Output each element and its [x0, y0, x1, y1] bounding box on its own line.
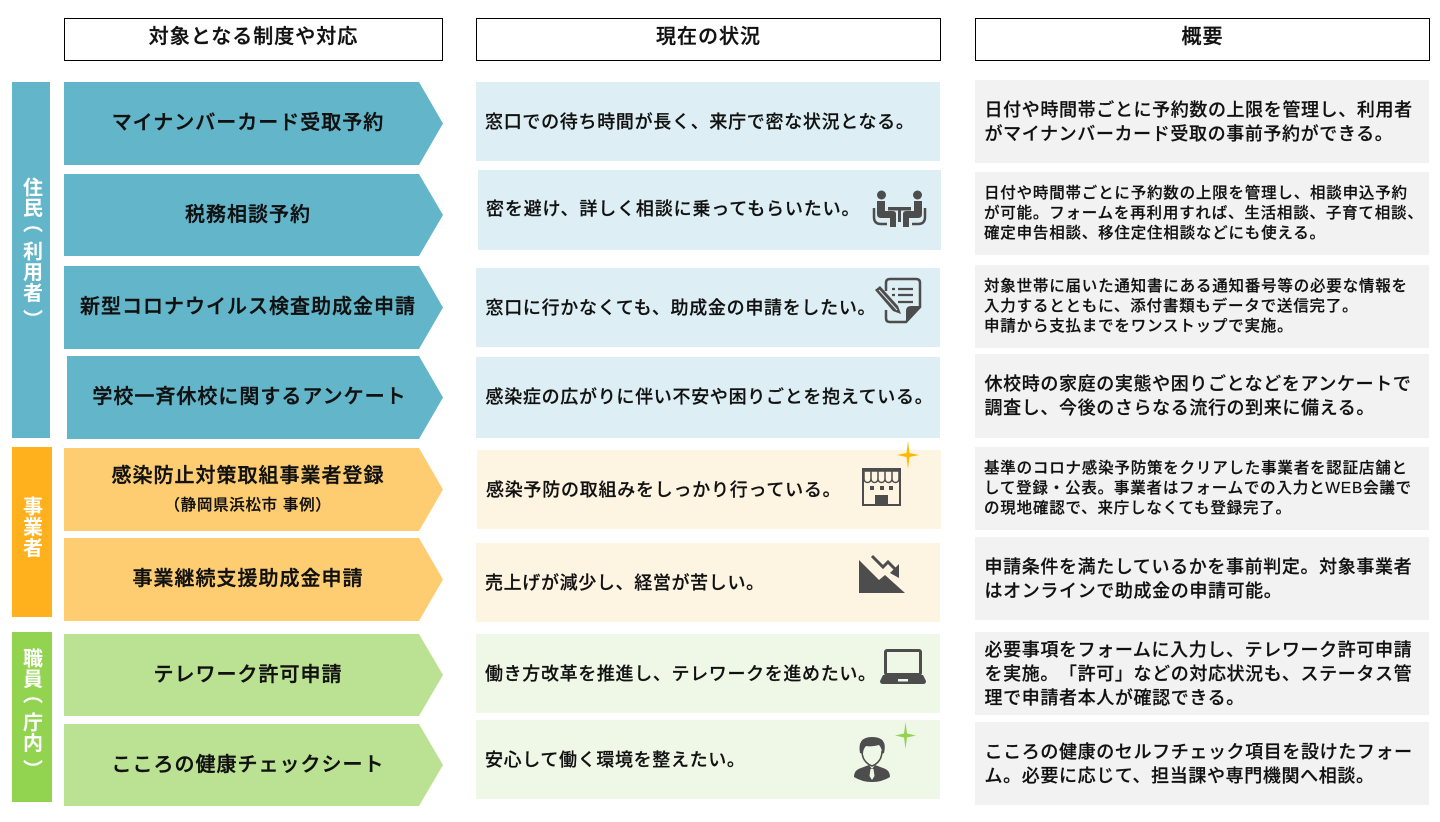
overview: telework	[975, 632, 1429, 715]
situation: telework	[476, 634, 940, 713]
overview: prevention registration: して登録・公表。事業者はフォームでの入力とWEB会議で	[984, 480, 1412, 496]
arrow: telework permit	[64, 634, 443, 716]
overview: telework: 必要事項をフォームに入力し、テレワーク許可申請	[984, 640, 1412, 660]
overview: tax consultation: 日付や時間帯ごとに予約数の上限を管理し、相談申込予約	[984, 184, 1408, 202]
overview: school closure survey: 休校時の家庭の実態や困りごとなどをアンケートで	[984, 374, 1412, 394]
situation: sales decline	[476, 543, 940, 622]
overview: my number card: 日付や時間帯ごとに予約数の上限を管理し、利用者	[984, 100, 1413, 120]
arrow: infection prevention registration: （静岡県浜松市 事例）	[164, 496, 332, 514]
arrow: my number card	[64, 82, 443, 165]
icon: sparkle orange	[897, 441, 919, 469]
overview: prevention registration: 基準のコロナ感染予防策をクリアした事業者を認証店舗と	[984, 460, 1408, 476]
icon: laptop	[880, 649, 926, 684]
overview: telework: 理で申請者本人が確認できる。	[984, 688, 1245, 708]
overview: school closure survey	[975, 354, 1429, 438]
overview: mental health	[975, 722, 1429, 805]
overview: school closure survey: 調査し、今後のさらなる流行の到来に備える。	[984, 398, 1375, 418]
icon: businessman	[854, 737, 890, 782]
situation: prevention efforts	[477, 450, 941, 529]
overview: tax consultation	[975, 172, 1429, 255]
overview: mental health: こころの健康のセルフチェック項目を設けたフォー	[984, 742, 1413, 762]
overview: business subsidy: 申請条件を満たしているかを事前判定。対象事業者	[984, 556, 1412, 576]
situation: avoid crowding: 密を避け、詳しく相談に乗ってもらいたい。	[486, 199, 860, 219]
heading: target systems	[64, 18, 443, 61]
overview: tax consultation: が可能。フォームを再利用すれば、生活相談、子育て相談、	[984, 204, 1424, 222]
icon: consultation at table	[872, 190, 926, 227]
category: staff: ）	[20, 759, 42, 780]
heading: target systems: 対象となる制度や対応	[149, 26, 358, 48]
situation: safe work environment: 安心して働く環境を整えたい。	[485, 750, 746, 770]
overview: covid test subsidy: 対象世帯に届いた通知書にある通知番号等の必要な情報を	[984, 278, 1408, 294]
situation: sales decline: 売上げが減少し、経営が苦しい。	[485, 573, 765, 593]
category: staff: 職員 庁内	[20, 648, 42, 753]
category: residents: （	[20, 213, 42, 234]
arrow: mental health check: こころの健康チェックシート	[112, 754, 384, 776]
overview: covid test subsidy: 申請から支払までをワンストップで実施。	[984, 318, 1293, 334]
overview: my number card: がマイナンバーカード受取の事前予約ができる。	[984, 124, 1393, 144]
situation: online application: 窓口に行かなくても、助成金の申請をしたい。	[486, 298, 876, 318]
category: residents: 住民 利用者	[20, 177, 42, 303]
arrow: my number card: マイナンバーカード受取予約	[112, 112, 384, 134]
category: businesses: 事業者	[20, 496, 42, 558]
overview: business subsidy: はオンラインで助成金の申請可能。	[984, 580, 1282, 600]
situation: anxiety	[476, 357, 940, 438]
situation: waiting time: 窓口での待ち時間が長く、来庁で密な状況となる。	[485, 112, 915, 132]
arrow: business continuity subsidy	[64, 538, 443, 621]
arrow: school closure survey	[67, 356, 443, 439]
arrow: covid test subsidy	[64, 266, 443, 349]
situation: waiting time	[476, 82, 940, 161]
arrow: mental health check	[64, 724, 443, 806]
arrow: tax consultation	[64, 174, 443, 256]
overview: tax consultation: 確定申告相談、移住定住相談などにも使える。	[984, 224, 1326, 242]
category: staff: （	[20, 684, 42, 705]
icon: sparkle green	[895, 722, 916, 749]
icon: storefront	[862, 468, 901, 506]
arrow: tax consultation: 税務相談予約	[185, 204, 311, 226]
arrow: school closure survey: 学校一斉休校に関するアンケート	[92, 386, 407, 408]
overview: covid test subsidy	[975, 265, 1429, 348]
situation: safe work environment	[476, 720, 940, 799]
situation: online application	[476, 268, 940, 347]
category: residents: ）	[20, 309, 42, 329]
category: staff	[12, 632, 50, 802]
arrow: telework permit: テレワーク許可申請	[154, 664, 342, 686]
overview: covid test subsidy: 入力するとともに、添付書類もデータで送信完了。	[984, 298, 1358, 314]
overview: my number card	[975, 80, 1429, 163]
icon: falling sales	[859, 555, 905, 593]
category: businesses	[12, 447, 50, 617]
heading: overview: 概要	[1182, 26, 1224, 48]
icon: document and pen	[875, 278, 922, 324]
heading: current situation	[476, 18, 941, 61]
heading: overview	[975, 18, 1430, 61]
overview: mental health: ム。必要に応じて、担当課や専門機関へ相談。	[984, 766, 1375, 786]
overview: prevention registration: の現地確認で、来庁しなくても登録完了。	[984, 500, 1292, 516]
situation: telework: 働き方改革を推進し、テレワークを進めたい。	[485, 664, 877, 684]
arrow: infection prevention registration: 感染防止対策取組事業者登録	[112, 464, 384, 486]
arrow: business continuity subsidy: 事業継続支援助成金申請	[132, 568, 364, 590]
situation: anxiety: 感染症の広がりに伴い不安や困りごとを抱えている。	[486, 387, 933, 407]
arrow: infection prevention registration	[64, 448, 443, 531]
overview: telework: を実施。「許可」などの対応状況も、ステータス管	[984, 664, 1412, 684]
situation: prevention efforts: 感染予防の取組みをしっかり行っている。	[486, 480, 841, 500]
category: residents	[12, 82, 50, 438]
situation: avoid crowding	[478, 170, 941, 250]
arrow: covid test subsidy: 新型コロナウイルス検査助成金申請	[80, 296, 416, 318]
overview: business subsidy	[975, 537, 1429, 620]
overview: prevention registration	[975, 447, 1429, 530]
heading: current situation: 現在の状況	[656, 26, 761, 48]
